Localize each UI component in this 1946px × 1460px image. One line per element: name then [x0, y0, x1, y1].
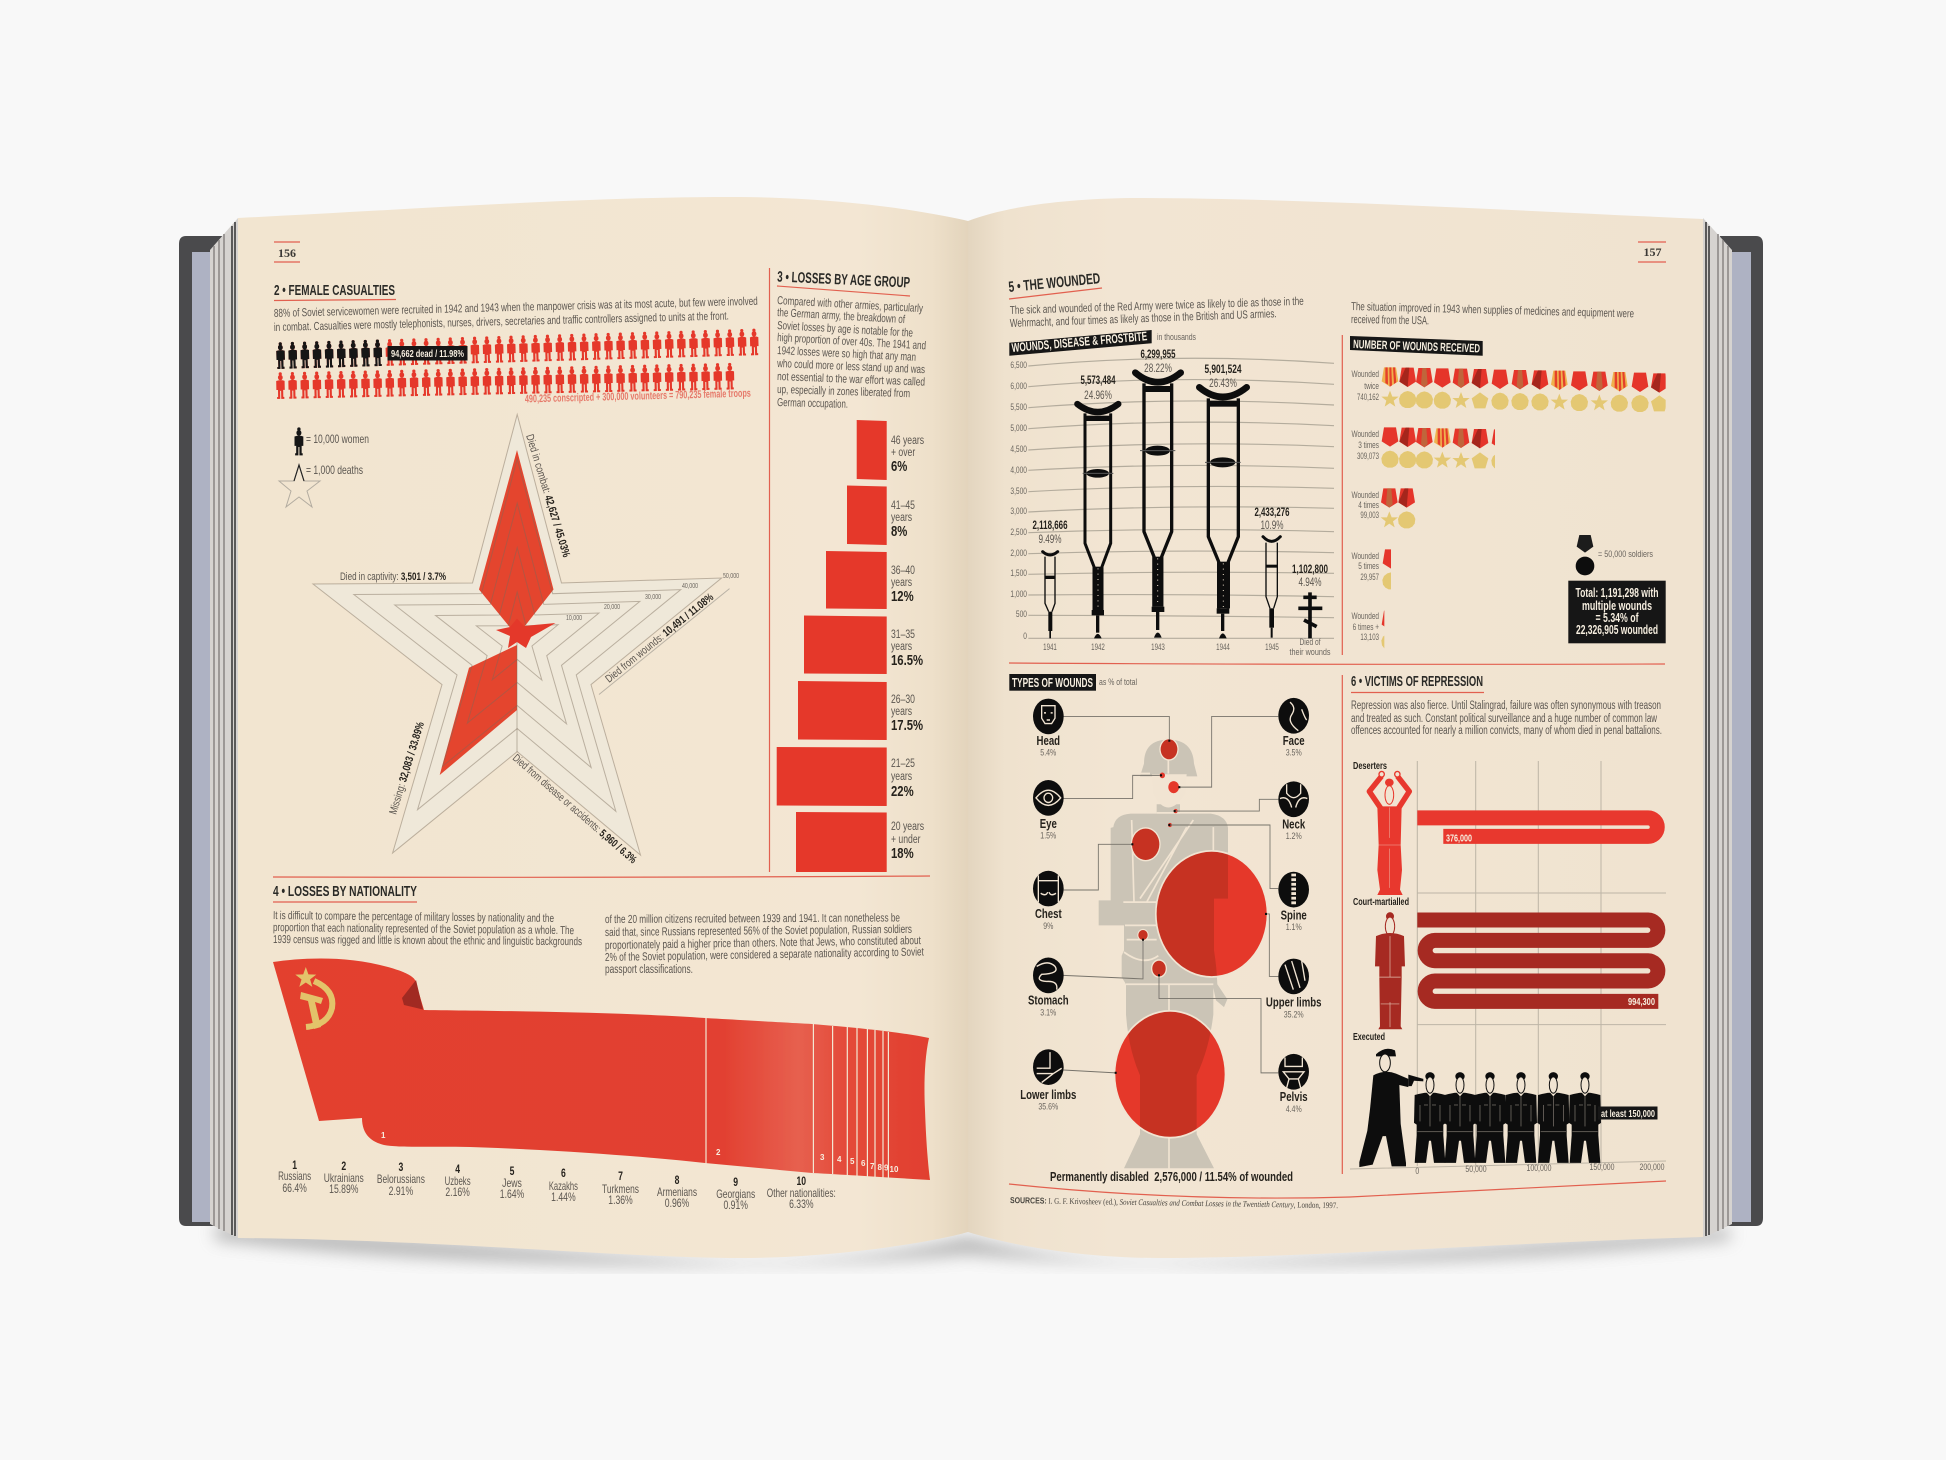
y axis labels: 4,000 — [1010, 465, 1027, 475]
wound row labels: Wounded — [1352, 551, 1379, 561]
soldier silhouette — [1099, 740, 1228, 1170]
nested star outlines — [313, 415, 722, 855]
dead label: 94,662 dead / 11.98% — [391, 348, 464, 360]
nationality legend — [278, 1160, 836, 1212]
wounded text right — [1351, 301, 1634, 327]
wound labels — [1020, 735, 1321, 1114]
age labels: 12% — [891, 588, 914, 604]
y axis labels: 2,500 — [1010, 527, 1027, 537]
wound row labels: 6 times + — [1353, 622, 1379, 632]
wound row labels: 309,073 — [1357, 451, 1379, 461]
red caption: 490,235 conscripted + 300,000 volunteers = 790,235 female troops — [525, 388, 751, 405]
age intro text: German occupation. — [777, 397, 848, 411]
nationality text right — [605, 912, 925, 976]
crutch year labels: 1944 — [1216, 642, 1230, 652]
wounded text: Wehrmacht, and four times as likely as those in the British and US armies. — [1010, 308, 1277, 330]
nationality legend: 0.91% — [723, 1200, 748, 1212]
crutch values: 26.43% — [1209, 378, 1237, 391]
flag segment dividers — [706, 1018, 888, 1179]
age labels: years — [891, 512, 912, 524]
segment numbers: 9 — [884, 1164, 889, 1172]
age labels: years — [891, 577, 912, 589]
icon: spine — [1278, 872, 1309, 907]
nationality legend: Other nationalities: — [767, 1186, 836, 1200]
age bars — [777, 420, 887, 872]
nationality legend: 9 — [733, 1177, 738, 1189]
arm label wounds: Died from wounds: 10,491 / 11.08% — [603, 591, 716, 685]
wounded text: The sick and wounded of the Red Army were twice as likely to die as those in the — [1010, 296, 1304, 317]
x axis labels: 50,000 — [1465, 1163, 1487, 1174]
age intro text: the German army, the breakdown of — [777, 307, 906, 326]
crutch year labels: their wounds — [1290, 647, 1331, 658]
icon: stomach — [1033, 957, 1064, 993]
wounds received title: NUMBER OF WOUNDS RECEIVED — [1353, 337, 1481, 355]
wound row labels: 3 times — [1358, 440, 1379, 450]
age intro text: not essential to the war effort was called — [777, 371, 925, 389]
y axis labels: 6,000 — [1010, 381, 1027, 391]
nationality legend: Turkmens — [602, 1182, 639, 1196]
book — [179, 197, 1763, 1266]
wound labels: Head — [1037, 735, 1060, 748]
intro text: in combat. Casualties were mostly telephonists, nurses, drivers, secretaries and traffic controllers assigned to units at the front. — [274, 310, 729, 334]
nationality legend: 1.44% — [551, 1192, 576, 1204]
wound labels: 35.6% — [1038, 1100, 1059, 1112]
repression text: offences accounted for nearly a million convicts, many of whom died in penal battalions. — [1351, 725, 1662, 737]
crutch values — [1032, 349, 1328, 590]
executed value label: at least 150,000 — [1601, 1108, 1655, 1120]
grid lines — [1028, 358, 1334, 638]
crutch chart — [1010, 349, 1334, 658]
wound labels: 35.2% — [1284, 1008, 1304, 1020]
age labels: + under — [891, 834, 921, 846]
page number 156: 156 — [278, 246, 296, 260]
nationality legend: 66.4% — [282, 1183, 307, 1195]
figures: executed soldiers — [1414, 1072, 1601, 1163]
wound labels: Upper limbs — [1266, 996, 1321, 1010]
wound row labels: 29,957 — [1360, 572, 1379, 582]
nationality legend: 6.33% — [789, 1199, 814, 1211]
nationality legend: 0.96% — [665, 1198, 689, 1210]
icon: face — [1278, 698, 1309, 734]
age labels: 41–45 — [891, 500, 915, 512]
nationality legend: 3 — [399, 1162, 404, 1174]
segment numbers: 3 — [820, 1153, 825, 1162]
wound labels: Spine — [1281, 909, 1307, 923]
heading — [1008, 270, 1102, 299]
age labels: 22% — [891, 783, 914, 799]
nationality legend: Uzbeks — [445, 1174, 471, 1188]
legend: = 10,000 women — [306, 432, 369, 446]
sources: SOURCES: I. G. F. Krivosheev (ed.), Soviet Casualties and Combat Losses in the Twentieth Century, London, 1997. — [1010, 1195, 1338, 1210]
nationality text right: said that, since Russians represented 56% of the Soviet population, Russian soldiers — [605, 924, 912, 939]
panel: number of wounds received — [1350, 336, 1668, 650]
y axis labels: 1,500 — [1010, 568, 1027, 578]
age intro text — [776, 295, 926, 411]
icon: pelvis — [1278, 1054, 1309, 1090]
wound row labels: Wounded — [1352, 611, 1379, 621]
page stack right — [1703, 218, 1732, 1238]
small centre star — [496, 619, 556, 648]
age labels: 16.5% — [891, 652, 923, 668]
crutch values: 9.49% — [1038, 534, 1062, 547]
red values lower left arm — [440, 645, 517, 775]
age labels: 26–30 — [891, 694, 915, 706]
panel: the wounded — [1008, 270, 1634, 658]
nationality legend: Georgians — [716, 1187, 755, 1201]
wound labels: 1.2% — [1286, 830, 1302, 841]
wound labels: 9% — [1043, 920, 1054, 931]
age labels: 21–25 — [891, 758, 915, 770]
medals row: wounded 3 times — [1381, 427, 1495, 468]
nationality text right: of the 20 million citizens recruited between 1939 and 1941. It can nonetheless be — [605, 912, 900, 926]
y axis labels: 3,500 — [1010, 486, 1027, 496]
page stack left — [210, 218, 238, 1238]
star radar chart: 10,000 — [566, 614, 582, 622]
nationality legend: Russians — [278, 1169, 311, 1183]
crutch year labels — [1043, 637, 1331, 658]
nationality legend: Belorussians — [377, 1172, 425, 1186]
nationality text left — [273, 910, 582, 948]
icon: upper limbs — [1278, 959, 1309, 994]
legend: = 1,000 deaths — [306, 463, 363, 477]
left page — [238, 197, 968, 1258]
page number 157: 157 — [1644, 245, 1662, 259]
segment numbers: 1 — [381, 1131, 386, 1140]
icon: head — [1033, 699, 1064, 734]
segment numbers: 2 — [716, 1148, 721, 1157]
wounded text right: received from the USA. — [1351, 314, 1429, 327]
back cover — [179, 236, 1763, 1226]
crutch chart title: WOUNDS, DISEASE & FROSTBITE — [1011, 329, 1148, 355]
wounded text — [1010, 296, 1304, 330]
nationality legend: 2 — [341, 1161, 346, 1173]
wound row labels — [1352, 369, 1379, 642]
star radar chart — [313, 415, 739, 866]
age intro text: who could more or less stand up and was — [776, 358, 925, 376]
wound labels: Stomach — [1028, 994, 1069, 1008]
age intro text: Soviet losses by age is notable for the — [777, 320, 913, 340]
segment numbers: 7 — [870, 1162, 875, 1171]
crutch values: 2,433,276 — [1254, 507, 1290, 519]
figure: court-martialled — [1375, 912, 1405, 1029]
wound labels: Pelvis — [1280, 1091, 1308, 1104]
heading: 5 • THE WOUNDED — [1008, 270, 1101, 296]
wound labels: Eye — [1040, 818, 1057, 831]
y axis labels — [1010, 360, 1027, 641]
age labels — [891, 435, 924, 861]
icon: lower limbs — [1033, 1049, 1064, 1085]
red values top arm — [479, 450, 554, 636]
heading — [777, 269, 910, 296]
age labels: 46 years — [891, 435, 924, 447]
medals row: wounded 5 times — [1382, 549, 1391, 590]
connector lines — [1063, 716, 1278, 1074]
age labels: 6% — [891, 458, 908, 474]
y axis labels: 500 — [1016, 609, 1027, 619]
age labels: years — [891, 771, 912, 783]
nationality legend: Ukrainians — [324, 1171, 364, 1185]
star radar chart: 20,000 — [604, 603, 620, 611]
figure: deserter — [1369, 771, 1409, 895]
wound row labels: 13,103 — [1360, 632, 1379, 642]
wound row labels: Wounded — [1352, 369, 1379, 379]
arm label missing: Missing: 32,083 / 33.89% — [387, 720, 427, 816]
age intro text: Compared with other armies, particularly — [777, 295, 923, 315]
nationality legend: 6 — [561, 1168, 566, 1180]
nationality legend: 4 — [455, 1164, 460, 1176]
y axis labels: 6,500 — [1010, 360, 1027, 370]
nationality legend: 15.89% — [329, 1184, 358, 1196]
legend medal — [1576, 535, 1653, 575]
heading: 2 • FEMALE CASUALTIES — [274, 282, 395, 299]
wounds received title — [1350, 336, 1483, 356]
segment numbers: 6 — [861, 1159, 866, 1168]
crutch 1944 — [1199, 387, 1247, 638]
wound labels: Neck — [1282, 818, 1306, 832]
wound row labels: twice — [1364, 381, 1379, 391]
pictogram women row 1 — [276, 329, 759, 369]
nationality legend: 2.16% — [445, 1187, 470, 1199]
star radar chart: 30,000 — [645, 593, 661, 601]
nationality legend: 5 — [510, 1166, 515, 1178]
arm label disease: Died from disease or accidents: 5,960 / 6.3% — [510, 752, 639, 866]
age labels: years — [891, 641, 912, 653]
scale labels: 50,000 — [723, 572, 739, 580]
panel: losses by nationality — [273, 883, 930, 1212]
medals row: wounded twice — [1381, 367, 1668, 412]
wound circles — [1115, 739, 1267, 1138]
crutch values: 2,118,666 — [1032, 520, 1068, 532]
age labels: 31–35 — [891, 629, 915, 641]
panel: types of wounds — [1009, 674, 1321, 1184]
segment numbers: 10 — [890, 1165, 899, 1174]
permanently disabled caption: Permanently disabled 2,576,000 / 11.54% of wounded — [1050, 1169, 1293, 1184]
total box: Total: 1,191,298 with — [1576, 586, 1658, 600]
bar: deserters — [1417, 818, 1657, 844]
crutch values: 6,299,955 — [1140, 349, 1176, 361]
x axis labels: 100,000 — [1526, 1162, 1552, 1173]
age labels: 8% — [891, 523, 908, 539]
panel: victims of repression — [1350, 673, 1666, 1176]
panel: female casualties — [274, 282, 759, 866]
figure labels: Court-martialled — [1353, 897, 1409, 908]
wound row labels: Wounded — [1352, 429, 1379, 439]
figure labels: Deserters — [1353, 761, 1387, 772]
age labels: years — [891, 706, 912, 718]
crutch year labels: 1943 — [1151, 642, 1165, 652]
crutch values: 28.22% — [1144, 363, 1172, 376]
wound labels: 1.1% — [1286, 921, 1302, 932]
figure: executioner — [1359, 1049, 1423, 1167]
heading — [274, 282, 396, 300]
arm label captivity: Died in captivity: 3,501 / 3.7% — [340, 571, 446, 583]
nationality legend: 1.36% — [608, 1195, 633, 1207]
pictogram women row 2 — [276, 363, 734, 399]
wound row labels: 5 times — [1358, 561, 1379, 571]
wound labels: Lower limbs — [1020, 1089, 1076, 1102]
page number 156 — [274, 242, 300, 262]
nationality text left: 1939 census was rigged and little is known about the ethnic and linguistic backgrounds — [273, 934, 582, 948]
heading: 3 • LOSSES BY AGE GROUP — [777, 269, 910, 292]
y axis labels: 3,000 — [1010, 506, 1027, 516]
repression text: and treated as such. Constant political surveillance and a huge number of common law — [1351, 713, 1657, 725]
segment numbers: 5 — [850, 1157, 855, 1166]
age labels: 17.5% — [891, 717, 923, 733]
crutch year labels: Died of — [1299, 637, 1321, 647]
crutch 1942 — [1077, 404, 1118, 638]
total box: multiple wounds — [1582, 599, 1652, 613]
age labels: + over — [891, 447, 916, 459]
x axis labels: 0 — [1415, 1165, 1420, 1176]
medals row: wounded 6 times — [1381, 610, 1384, 648]
x axis labels — [1415, 1161, 1665, 1176]
types title: as % of total — [1099, 677, 1137, 687]
medals row: wounded 4 times — [1381, 488, 1415, 528]
nationality text left: It is difficult to compare the percentage of military losses by nationality and the — [273, 910, 554, 925]
segment numbers — [381, 1131, 899, 1174]
crutch chart title: in thousands — [1157, 332, 1196, 342]
total box: = 5.34% of — [1596, 611, 1639, 625]
hammer and sickle — [295, 967, 332, 1029]
crutch 1945 — [1263, 537, 1280, 638]
crutch values: 10.9% — [1260, 520, 1284, 533]
end paper panels — [192, 252, 1751, 1222]
nationality legend: 10 — [797, 1176, 806, 1188]
flag chart — [273, 958, 930, 1180]
nationality text right: proportionately paid a higher price than others. Note that Jews, who constituted about — [605, 935, 922, 952]
wounded text right: The situation improved in 1943 when supplies of medicines and equipment were — [1351, 301, 1634, 320]
crutch values: 4.94% — [1298, 577, 1322, 590]
heading: 4 • LOSSES BY NATIONALITY — [273, 883, 417, 900]
nationality legend: Jews — [502, 1178, 522, 1190]
age labels: 36–40 — [891, 565, 915, 577]
age intro text: high proportion of over 40s. The 1941 and — [777, 332, 926, 352]
nationality legend: 8 — [675, 1175, 680, 1187]
bar: court-martialled — [1417, 920, 1658, 1008]
nationality legend: 2.91% — [389, 1186, 413, 1198]
page number 157 — [1638, 242, 1666, 262]
wound row labels: 99,003 — [1360, 510, 1379, 520]
repression text — [1351, 700, 1662, 737]
heading: 6 • VICTIMS OF REPRESSION — [1351, 673, 1483, 690]
intro text — [274, 296, 758, 334]
soldier diagram — [1033, 698, 1309, 1170]
crutch values: 24.96% — [1084, 390, 1112, 403]
age intro text: up, especially in zones liberated from — [777, 384, 910, 400]
wound row labels: 4 times — [1358, 500, 1379, 510]
legend — [279, 427, 369, 507]
icon: neck — [1278, 781, 1309, 817]
crutch values: 5,573,484 — [1080, 375, 1116, 387]
star radar chart: 40,000 — [682, 582, 698, 590]
nationality legend: 1.64% — [500, 1189, 524, 1201]
wound row labels: Wounded — [1352, 490, 1379, 500]
intro text: 88% of Soviet servicewomen were recruited in 1942 and 1943 when the manpower crisis was at its most acute, but few were involved — [274, 296, 758, 320]
icon: eye — [1033, 780, 1064, 816]
wound labels: 1.5% — [1040, 829, 1057, 841]
bar: court-martialled: 994,300 — [1628, 997, 1655, 1008]
wound row labels: 740,162 — [1357, 392, 1379, 402]
heading — [1351, 673, 1484, 692]
nationality legend: Kazakhs — [549, 1179, 578, 1193]
age intro text: 1942 losses were so high that any man — [777, 345, 916, 364]
x axis labels: 150,000 — [1589, 1161, 1615, 1172]
wound labels: 4.4% — [1286, 1103, 1302, 1114]
crutch 1943 — [1135, 373, 1181, 638]
total box — [1568, 581, 1666, 643]
y axis labels: 2,000 — [1010, 548, 1027, 558]
y axis labels: 1,000 — [1010, 589, 1027, 599]
y axis labels: 5,000 — [1010, 423, 1027, 433]
figure labels — [1353, 761, 1409, 1043]
legend medal: = 50,000 soldiers — [1598, 549, 1653, 560]
flag fold — [402, 980, 423, 1010]
bar: deserters: 376,000 — [1446, 834, 1472, 844]
dead label — [388, 346, 468, 360]
wound labels: Chest — [1035, 908, 1062, 921]
x axis labels: 200,000 — [1639, 1161, 1665, 1172]
crutch year labels: 1942 — [1091, 642, 1105, 652]
nationality text right: 2% of the Soviet population, were considered a separate nationality according to Soviet — [605, 946, 925, 964]
crutch values: 5,901,524 — [1204, 364, 1242, 376]
right page — [968, 198, 1703, 1258]
crutch 1941 — [1043, 552, 1058, 638]
y axis labels: 5,500 — [1010, 402, 1027, 412]
segment numbers: 8 — [878, 1163, 882, 1172]
nationality legend: 7 — [618, 1171, 623, 1183]
crutch values: 1,102,800 — [1292, 564, 1328, 576]
y axis labels: 0 — [1023, 631, 1027, 641]
nationality text right: passport classifications. — [605, 964, 693, 976]
nationality text left: proportion that each nationality represented of the Soviet population as a whole. The — [273, 922, 574, 937]
wound labels: 5.4% — [1040, 746, 1057, 758]
arm label combat: Died in combat: 42,627 / 45.03% — [523, 433, 572, 559]
age labels: 18% — [891, 845, 914, 861]
types title: TYPES OF WOUNDS — [1012, 676, 1093, 690]
figure labels: Executed — [1353, 1032, 1385, 1043]
y axis labels: 4,500 — [1010, 444, 1027, 454]
total box: 22,326,905 wounded — [1576, 623, 1658, 637]
icon: chest — [1033, 871, 1064, 906]
segment numbers: 4 — [837, 1155, 842, 1164]
executed value label — [1598, 1106, 1658, 1120]
age labels: 20 years — [891, 821, 924, 833]
book shadow — [215, 1225, 1730, 1266]
cross: died of wounds — [1298, 592, 1322, 638]
wound labels: 3.1% — [1040, 1006, 1057, 1018]
repression text: Repression was also fierce. Until Stalingrad, failure was often synonymous with treason — [1351, 700, 1661, 712]
nationality legend: Armenians — [657, 1185, 697, 1199]
crutch year labels: 1945 — [1265, 642, 1279, 652]
panel: losses by age group — [776, 269, 926, 872]
nationality legend: 1 — [292, 1160, 297, 1172]
wound labels: Face — [1283, 735, 1305, 748]
crutch year labels: 1941 — [1043, 642, 1057, 652]
wound labels: 3.5% — [1286, 746, 1302, 758]
